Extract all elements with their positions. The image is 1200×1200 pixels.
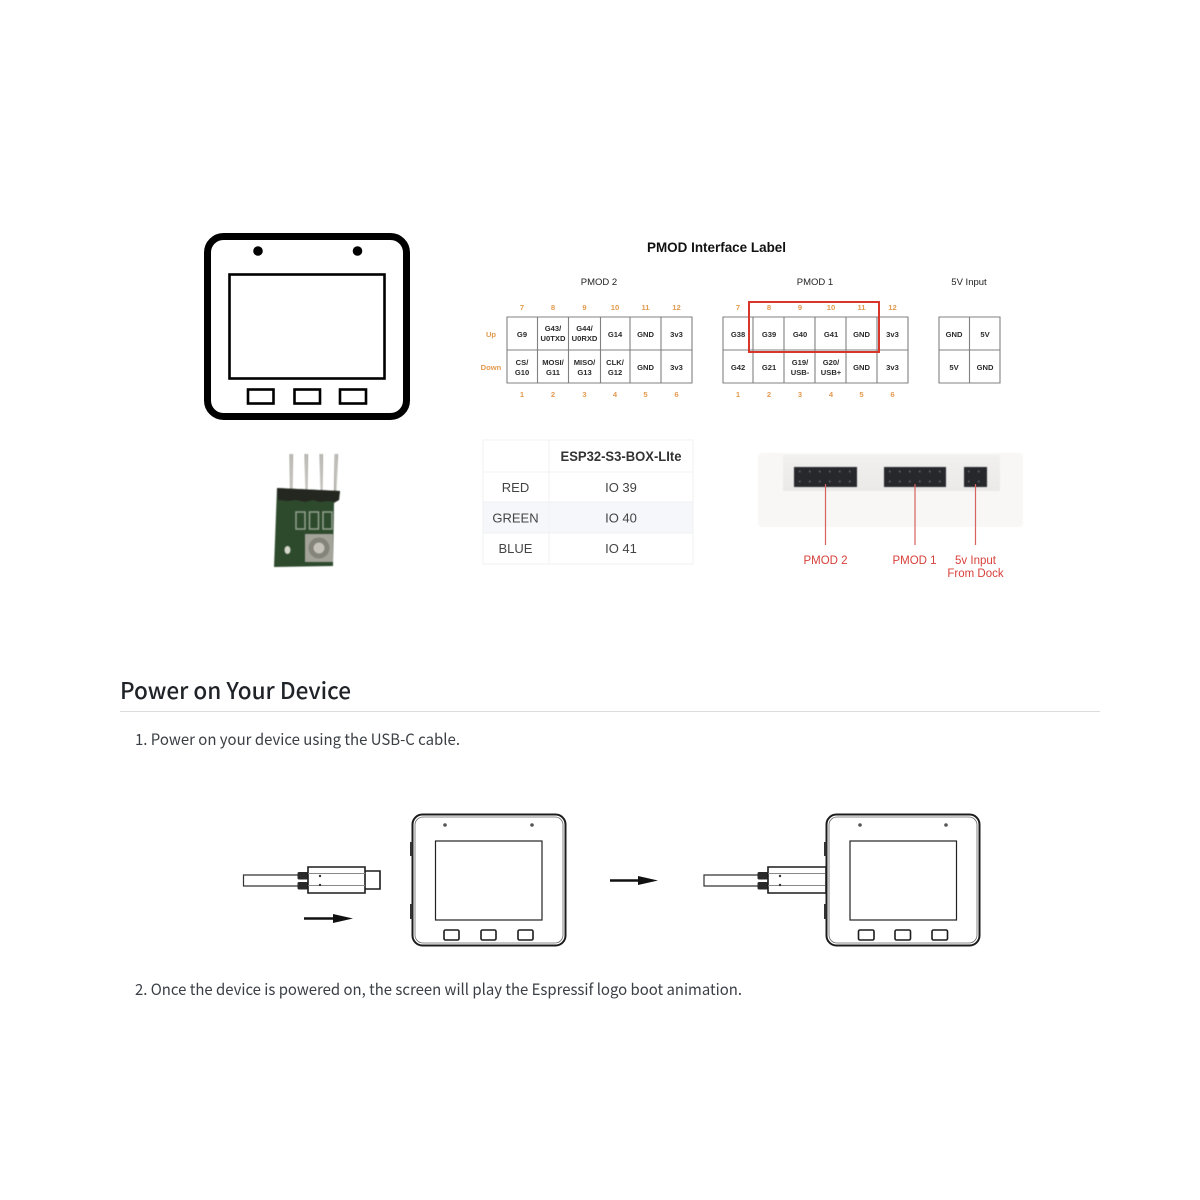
arrow: to next state [610, 876, 658, 885]
icon: device outline [208, 236, 406, 416]
table: PMOD 2: MISO/ [574, 358, 596, 367]
table: PMOD 2: G14 [608, 330, 623, 339]
highlight: red box around LED pins [749, 302, 879, 352]
diagram: device front, cable plugged in [704, 814, 980, 946]
table: PMOD 1: 3v3 [886, 363, 899, 372]
table: PMOD 1: USB+ [821, 368, 842, 377]
table: PMOD 1: 12 [888, 303, 897, 312]
table: PMOD 1: 3 [798, 390, 802, 399]
table: PMOD 1: USB- [791, 368, 810, 377]
table: PMOD 1: 8 [767, 303, 771, 312]
table: PMOD 1: G42 [731, 363, 745, 372]
table: PMOD 2: 3v3 [670, 330, 683, 339]
table: ESP32-S3-BOX-Lite LED pins: RED [502, 480, 529, 495]
table: PMOD 2: 8 [551, 303, 555, 312]
table: PMOD 1: GND [853, 330, 870, 339]
table: PMOD 2: Down [481, 363, 502, 372]
table: ESP32-S3-BOX-Lite LED pins: BLUE [499, 541, 533, 556]
table: PMOD 2: U0TXD [541, 334, 566, 343]
table: PMOD 1: 7 [736, 303, 740, 312]
table: PMOD 2: 3 [582, 390, 587, 399]
table: PMOD 2: 12 [672, 303, 681, 312]
photo: device connector edge: 5v Input [955, 555, 997, 567]
table: PMOD 1: 3v3 [886, 330, 899, 339]
photo: device connector edge: From Dock [947, 568, 1004, 580]
photo: RGB LED module [274, 454, 340, 567]
table: PMOD 2: MOSI/ [542, 358, 565, 367]
table: PMOD 1 [723, 277, 908, 399]
table: PMOD 1: 2 [767, 390, 771, 399]
table: PMOD 1: 5 [859, 390, 864, 399]
table: PMOD 2: 11 [641, 303, 650, 312]
table: PMOD 2: G44/ [576, 324, 594, 333]
table: PMOD 1: G39 [762, 330, 776, 339]
table: PMOD 2: CS/ [516, 358, 529, 367]
table: PMOD 1: G19/ [792, 358, 809, 367]
table: PMOD 2: G11 [546, 368, 561, 377]
table: PMOD 1: G38 [731, 330, 745, 339]
table: ESP32-S3-BOX-Lite LED pins: ESP32-S3-BOX-LIte [560, 449, 682, 464]
table: PMOD 2: G9 [517, 330, 527, 339]
table: PMOD 2: G10 [515, 368, 529, 377]
table: PMOD 2: 10 [611, 303, 619, 312]
photo: device connector edge: PMOD 2 [803, 555, 848, 567]
table: ESP32-S3-BOX-Lite LED pins: IO 39 [605, 480, 637, 495]
table: 5V Input: GND [946, 330, 963, 339]
diagram: device front, cable unplugged [410, 814, 566, 946]
table: PMOD 2: 2 [551, 390, 555, 399]
table: PMOD 1: G20/ [823, 358, 840, 367]
table: ESP32-S3-BOX-Lite LED pins: IO 40 [605, 510, 637, 526]
table: 5V Input [939, 277, 1000, 383]
table: 5V Input: GND [977, 363, 994, 372]
heading: Power on Your Device: Power on Your Device [120, 672, 351, 706]
table: ESP32-S3-BOX-Lite LED pins: IO 41 [605, 541, 637, 556]
photo: device connector edge [758, 453, 1023, 580]
table: 5V Input: 5V Input [951, 277, 987, 288]
table: PMOD 2 [481, 277, 692, 399]
table: PMOD 2: G43/ [545, 324, 562, 333]
table: PMOD 2: Up [486, 330, 496, 339]
table: PMOD 2: G13 [577, 368, 592, 377]
table: ESP32-S3-BOX-Lite LED pins: GREEN [492, 510, 539, 526]
arrow: insert direction [304, 914, 353, 923]
table: PMOD 1: GND [853, 363, 870, 372]
text: step 2: 2. Once the device is powered on, the screen will play the Espressif logo boot animation. [135, 978, 742, 1000]
table: PMOD 1: 1 [736, 390, 741, 399]
table: 5V Input: 5V [949, 363, 960, 372]
table: PMOD 1: G21 [762, 363, 777, 372]
table: PMOD 2: G12 [608, 368, 622, 377]
photo: device connector edge: PMOD 1 [892, 555, 937, 567]
table: 5V Input: 5V [980, 330, 991, 339]
table: PMOD 2: 5 [643, 390, 648, 399]
diagram: USB-C cable before insertion [244, 867, 380, 893]
title: PMOD Interface Label: PMOD Interface Label [647, 239, 786, 255]
table: PMOD 1: 10 [827, 303, 835, 312]
table: PMOD 2: GND [637, 330, 654, 339]
table: PMOD 2: 6 [674, 390, 679, 399]
table: PMOD 2: 9 [582, 303, 587, 312]
table: PMOD 1: PMOD 1 [797, 277, 833, 288]
table: PMOD 2: 4 [613, 390, 618, 399]
table: PMOD 2: CLK/ [606, 358, 625, 367]
table: PMOD 2: 3v3 [670, 363, 683, 372]
table: PMOD 1: 9 [798, 303, 802, 312]
table: PMOD 1: 11 [857, 303, 866, 312]
table: PMOD 2: 1 [520, 390, 525, 399]
table: ESP32-S3-BOX-Lite LED pins [483, 440, 693, 564]
table: PMOD 2: 7 [520, 303, 524, 312]
table: PMOD 2: U0RXD [572, 334, 598, 343]
table: PMOD 1: G41 [824, 330, 839, 339]
table: PMOD 2: GND [637, 363, 654, 372]
table: PMOD 2: PMOD 2 [581, 277, 617, 288]
table: PMOD 1: 4 [829, 390, 834, 399]
table: PMOD 1: G40 [793, 330, 807, 339]
table: PMOD 1: 6 [890, 390, 895, 399]
text: step 1: 1. Power on your device using the USB-C cable. [135, 728, 460, 750]
